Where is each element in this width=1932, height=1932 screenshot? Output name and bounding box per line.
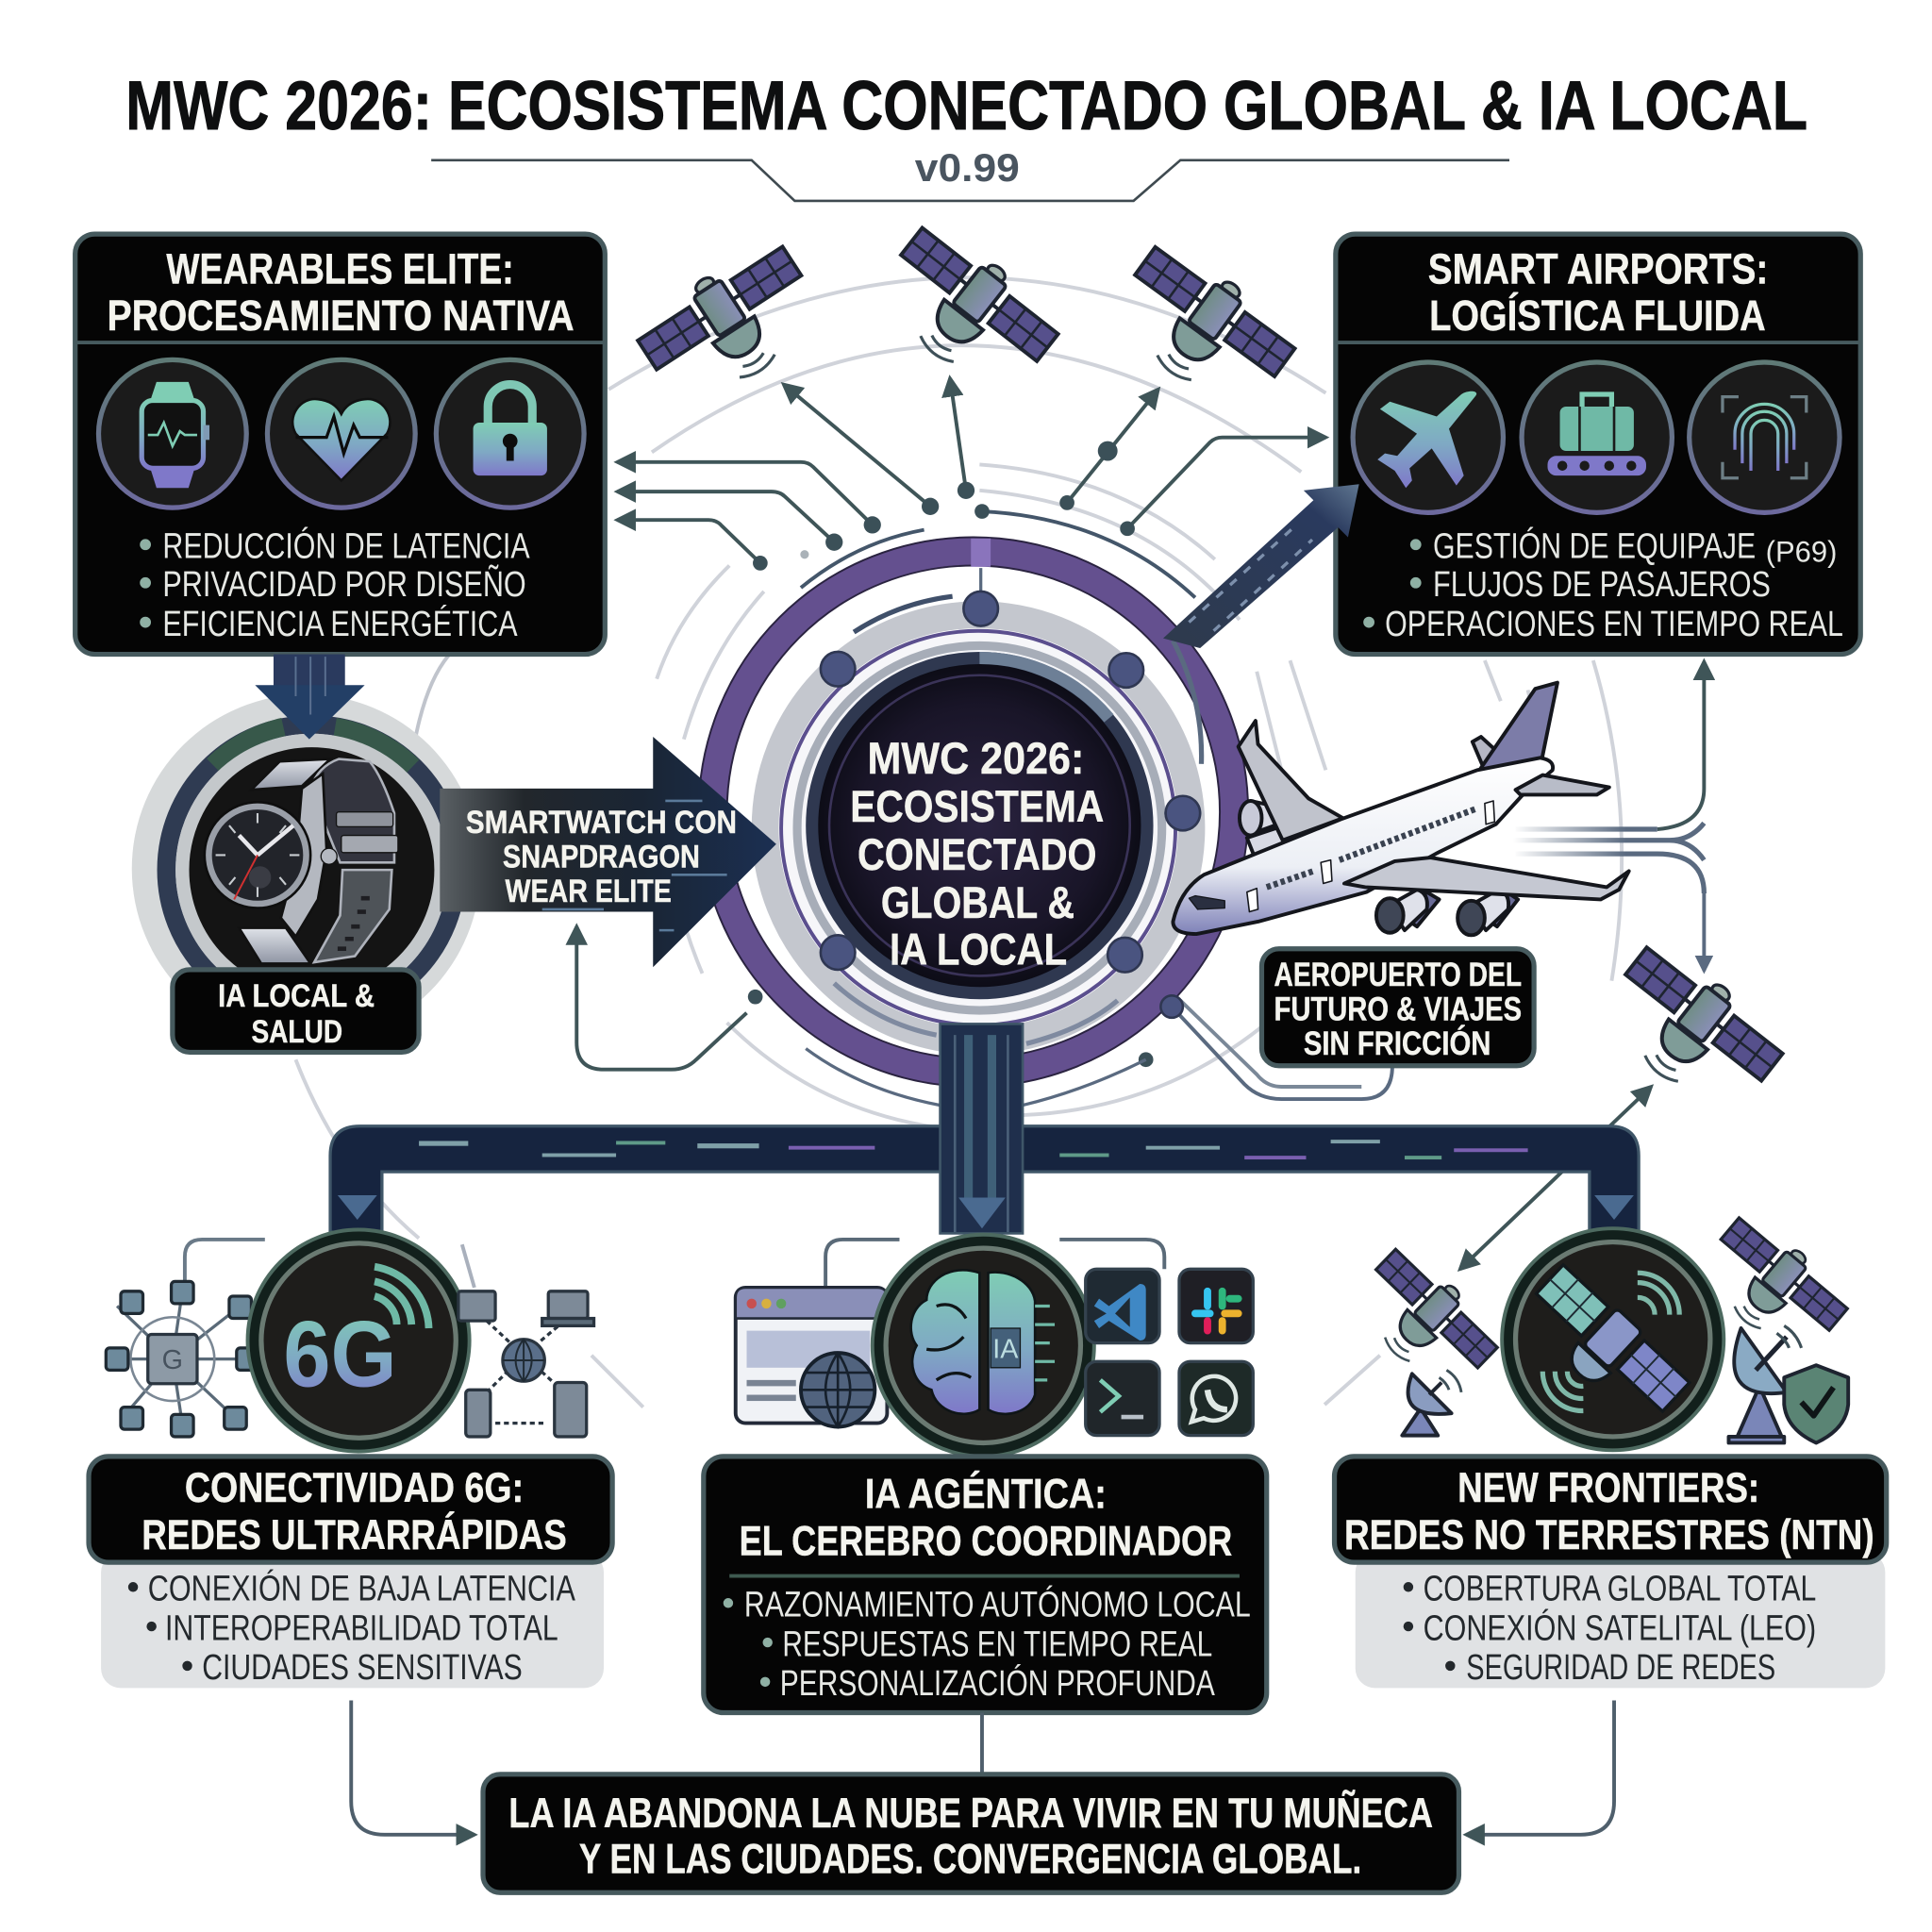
6G medallion: 6G [283, 1302, 397, 1407]
arrow: smartwatch to hub [440, 737, 776, 967]
far wing [1239, 721, 1343, 841]
bullet list: INTEROPERABILIDAD TOTAL [165, 1608, 558, 1648]
bullet list: CONEXIÓN SATELITAL (LEO) [1424, 1607, 1816, 1648]
label: IA local y salud [173, 970, 419, 1052]
icon: connected devices [458, 1291, 594, 1437]
cockpit and windows [1189, 801, 1494, 912]
label: IA local y salud: IA LOCAL & [218, 978, 375, 1014]
trunk arrowheads [338, 1195, 377, 1220]
icon: luggage [1522, 362, 1672, 512]
hub title: MWC 2026: [868, 733, 1084, 783]
heading: SMART AIRPORTS: [1428, 244, 1768, 292]
data trunk [330, 1024, 1639, 1233]
panel: conectividad 6G [89, 1457, 612, 1688]
label: aeropuerto del futuro: AEROPUERTO DEL [1274, 957, 1522, 993]
bullet list [1404, 1570, 1816, 1688]
heading [1344, 1465, 1874, 1558]
satellite bottom left [1343, 1240, 1507, 1402]
watch face [205, 802, 310, 908]
satellite 1 [629, 233, 832, 418]
panel: smart airports [1336, 234, 1860, 655]
bullet list: FLUJOS DE PASAJEROS [1433, 565, 1771, 605]
conclusion banner: LA IA ABANDONA LA NUBE PARA VIVIR EN TU MUÑECA [508, 1790, 1433, 1837]
far engines [1240, 801, 1293, 862]
heading: IA AGÉNTICA: [865, 1471, 1107, 1518]
icon: slack [1179, 1269, 1253, 1343]
stabilizer [1516, 775, 1609, 794]
6G medallion [248, 1230, 470, 1452]
bullet list: EFICIENCIA ENERGÉTICA [162, 604, 518, 644]
panel: wearables elite [75, 234, 605, 655]
faint orbit arcs [295, 277, 1622, 1407]
NTN node [1343, 1208, 1856, 1450]
icon: code editor [1086, 1269, 1159, 1343]
arrow: hub to smart airports [1163, 484, 1359, 648]
satellite 2 [866, 215, 1068, 407]
label: aeropuerto del futuro [1261, 949, 1534, 1066]
IA medallion [873, 1235, 1094, 1457]
icon: chip network [106, 1281, 258, 1437]
icon: whatsapp [1179, 1361, 1253, 1436]
icon: dish and shield [1728, 1325, 1848, 1442]
fuselage [1173, 758, 1553, 934]
heading: PROCESAMIENTO NATIVA [108, 291, 575, 340]
panel: new frontiers [1335, 1457, 1887, 1688]
connectors to conclusion [351, 1700, 1614, 1835]
icon: terminal [1086, 1361, 1159, 1436]
bullet list [140, 526, 530, 644]
icon: fingerprint [1690, 362, 1840, 512]
conclusion banner: Y EN LAS CIUDADES. CONVERGENCIA GLOBAL. [579, 1836, 1361, 1882]
title bracket [431, 160, 1509, 201]
icon: browser [736, 1288, 887, 1426]
arrow label [466, 805, 737, 909]
hub title: ECOSISTEMA [850, 781, 1104, 831]
network arrows [576, 378, 1704, 1269]
hub title [850, 733, 1104, 974]
heading: LOGÍSTICA FLUIDA [1429, 291, 1766, 340]
NTN medallion [1502, 1228, 1724, 1450]
heading: NEW FRONTIERS: [1457, 1465, 1759, 1511]
bullet list: GESTIÓN DE EQUIPAJE [1433, 526, 1756, 567]
heading [740, 1471, 1232, 1564]
IA node [736, 1235, 1253, 1457]
arrow label: SMARTWATCH CON [466, 805, 737, 841]
bullet list: REDUCCIÓN DE LATENCIA [162, 526, 530, 567]
hub title: GLOBAL & [881, 877, 1074, 927]
smartwatch medallion [132, 694, 480, 1043]
bullet list: CIUDADES SENSITIVAS [202, 1648, 523, 1688]
icon: smartwatch [98, 359, 246, 508]
bullet list: CONEXIÓN DE BAJA LATENCIA [148, 1569, 576, 1609]
icon: chip network: G [162, 1345, 183, 1375]
arrow: wearables to smartwatch [255, 655, 365, 740]
heading [108, 244, 575, 340]
bullet list: SEGURIDAD DE REDES [1466, 1648, 1775, 1688]
version: v0.99 [915, 145, 1020, 190]
heading: EL CEREBRO COORDINADOR [740, 1518, 1232, 1564]
icon: dish left [1402, 1370, 1461, 1436]
IA medallion: IA [992, 1334, 1019, 1364]
central hub [699, 537, 1248, 1087]
heading: REDES ULTRARRÁPIDAS [142, 1511, 567, 1558]
satellite bottom right [1690, 1208, 1856, 1366]
arrow label: WEAR ELITE [506, 874, 672, 909]
bullet list [724, 1585, 1251, 1704]
icon: padlock [436, 359, 584, 508]
fin [1473, 737, 1496, 768]
icon: heart [267, 359, 415, 508]
hub title: CONECTADO [858, 829, 1096, 879]
heading: WEARABLES ELITE: [166, 244, 514, 292]
bullet list: RESPUESTAS EN TIEMPO REAL [782, 1624, 1212, 1664]
bullet list [128, 1569, 576, 1688]
icon: airplane [1353, 362, 1503, 512]
heading [1428, 244, 1768, 340]
hub nodes [821, 591, 1200, 1018]
bullet list [1363, 526, 1843, 644]
bullet list: COBERTURA GLOBAL TOTAL [1424, 1570, 1816, 1609]
label: IA local y salud: SALUD [251, 1014, 342, 1050]
label: aeropuerto del futuro: FUTURO & VIAJES [1274, 991, 1522, 1027]
satellite 4 [1591, 935, 1792, 1125]
label: aeropuerto del futuro: SIN FRICCIÓN [1304, 1024, 1491, 1062]
arrow label: SNAPDRAGON [503, 840, 700, 875]
bullet list: PRIVACIDAD POR DISEÑO [162, 564, 526, 605]
near engines [1376, 890, 1518, 935]
heading [142, 1465, 567, 1558]
satellite 3 [1101, 234, 1305, 423]
heading: CONECTIVIDAD 6G: [185, 1465, 524, 1511]
6G node [106, 1230, 594, 1452]
conclusion banner [483, 1774, 1458, 1892]
bullet list: RAZONAMIENTO AUTÓNOMO LOCAL [744, 1585, 1251, 1625]
watch strap [251, 759, 330, 790]
near wing [1344, 858, 1629, 899]
bullet list: PERSONALIZACIÓN PROFUNDA [780, 1663, 1215, 1704]
bullet list: (P69) [1766, 536, 1837, 569]
panel: IA agéntica [704, 1457, 1267, 1713]
airplane [1173, 683, 1629, 935]
hub title: IA LOCAL [890, 924, 1067, 974]
